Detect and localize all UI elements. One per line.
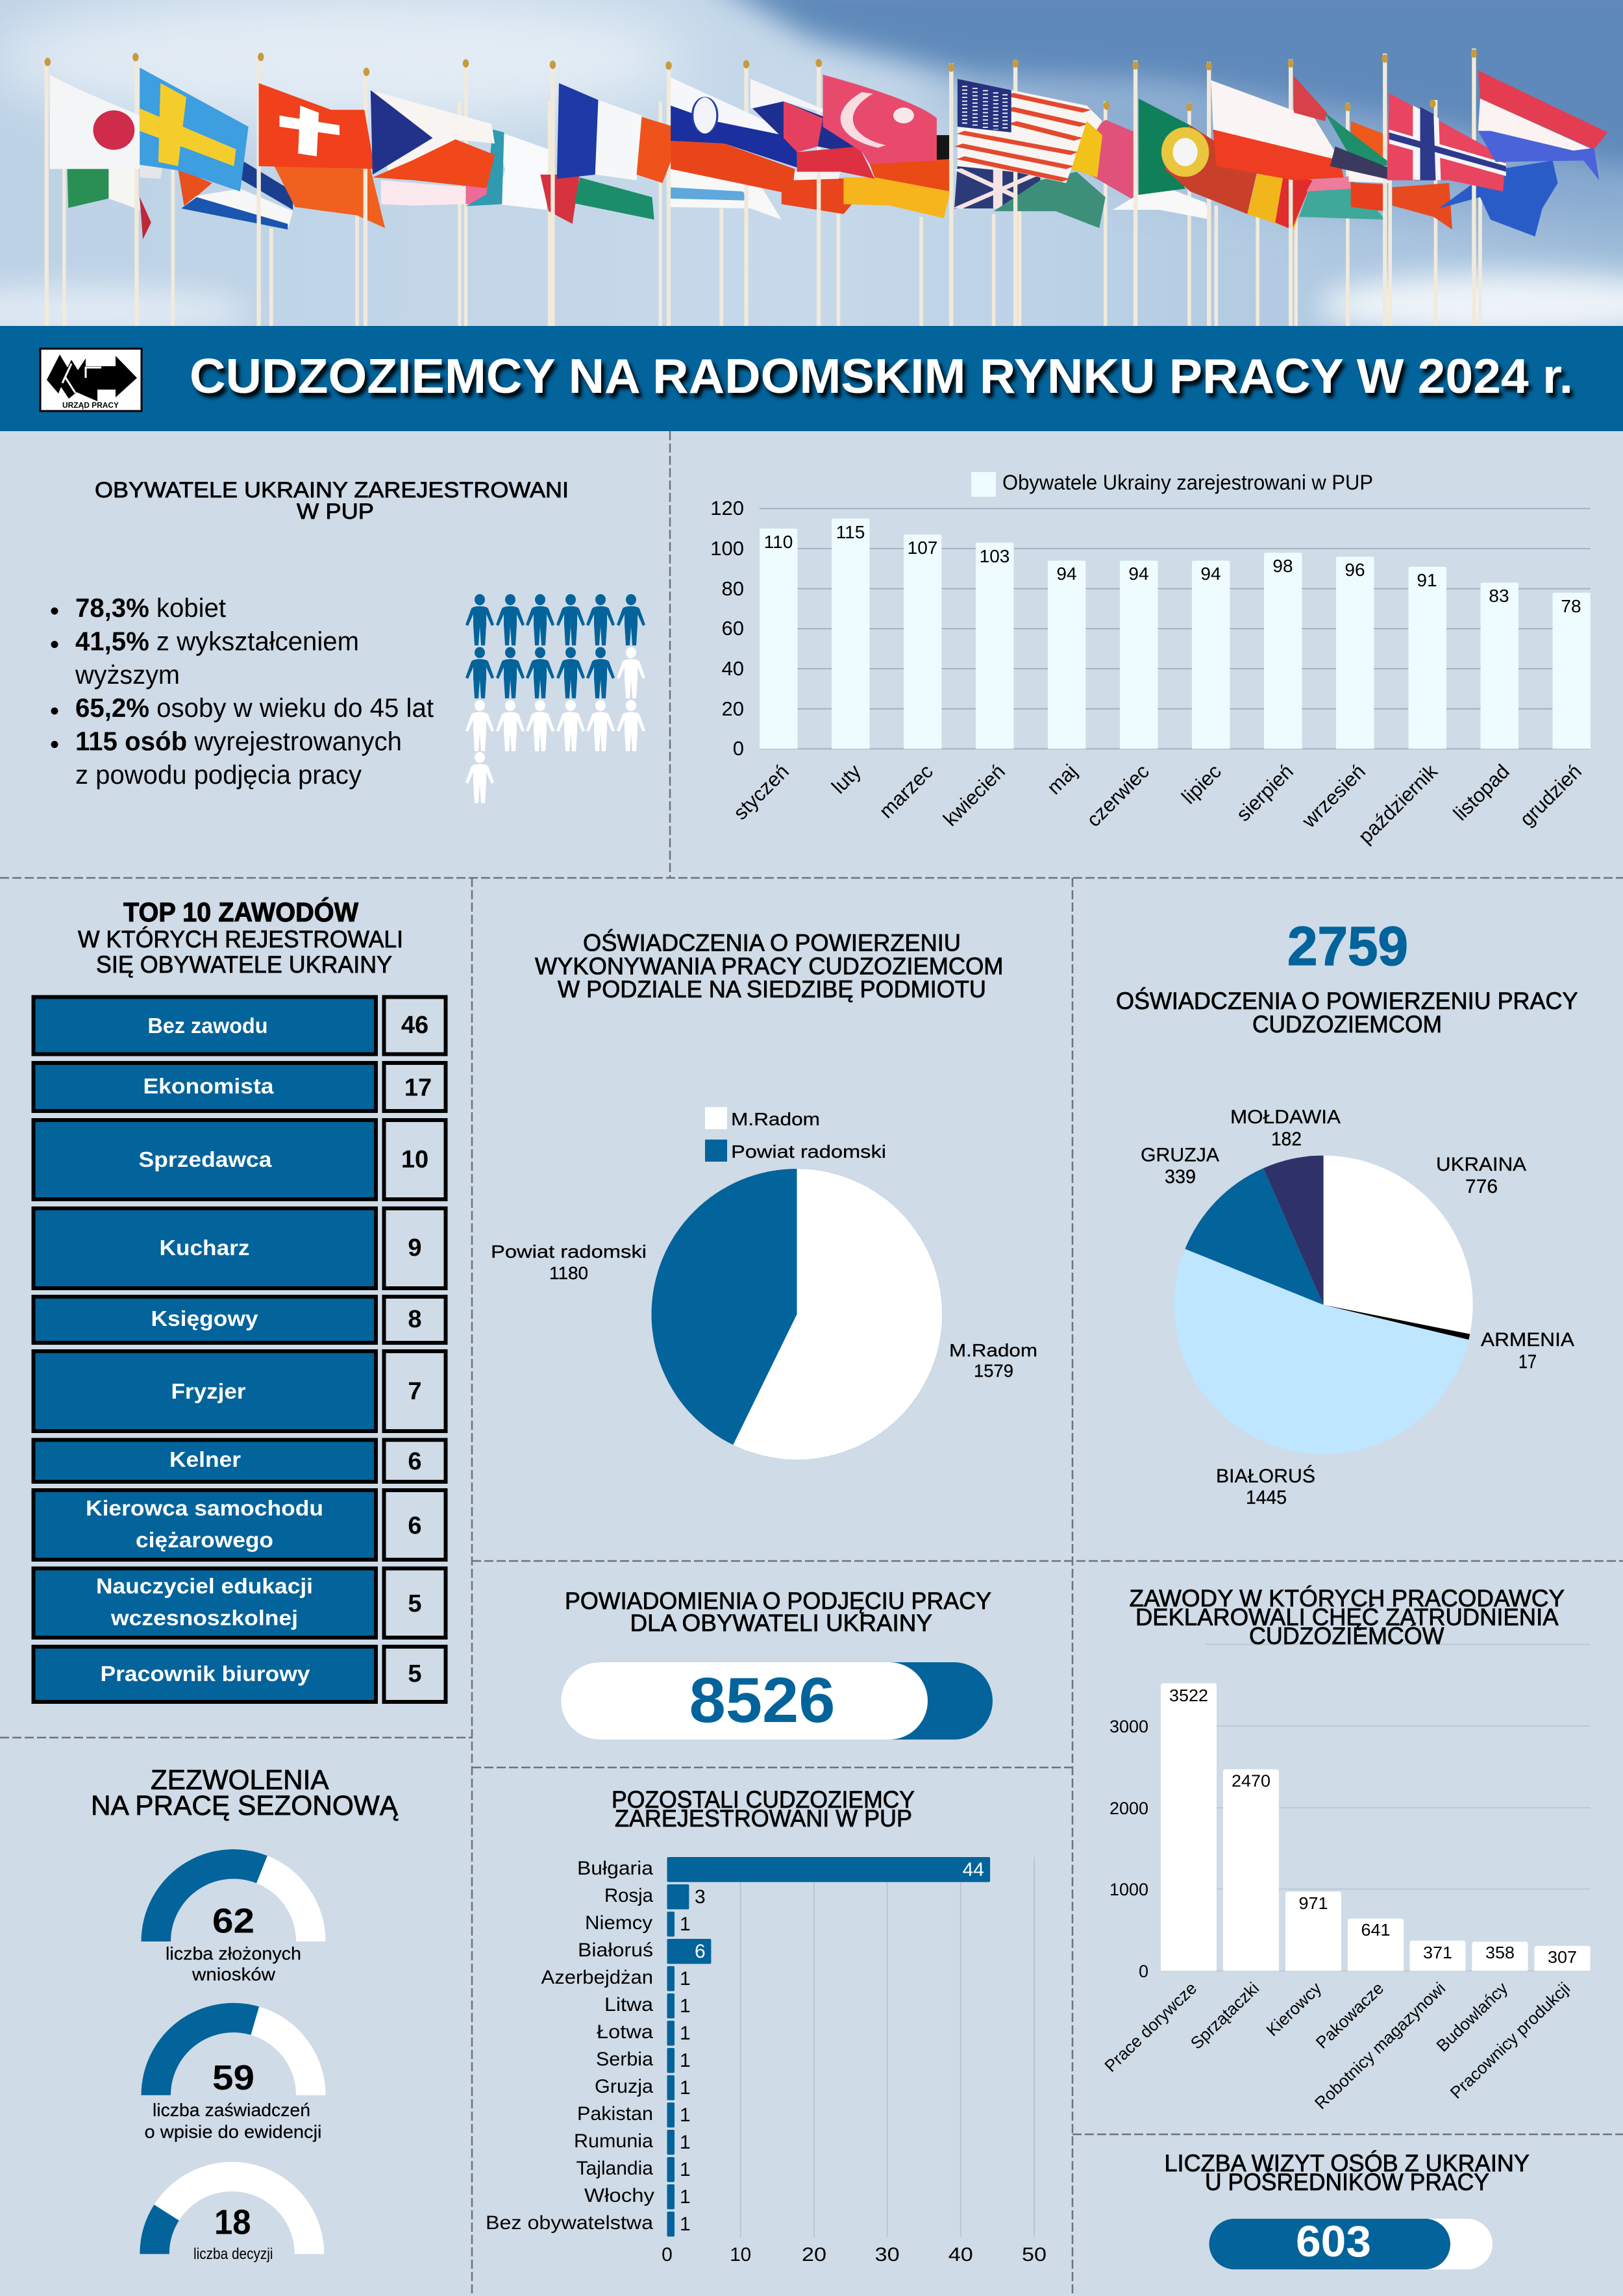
panel: declarations by country [1116,916,1578,1508]
horizontal bar chart: countries: 1 [680,2023,691,2044]
heading: declarations by country: CUDZOZIEMCOM [1252,1011,1442,1038]
bar chart: monthly registered Ukrainian citizens: 0 [733,737,744,760]
table of occupations: 17 [404,1074,432,1101]
data labels: 91 [1417,570,1437,590]
gauge: 18 decisions [140,2162,324,2263]
gauge: 59 certificates: liczba zaświadczeń [153,2100,310,2120]
bar chart: occupations: Pracownicy produkcji [1446,1978,1574,2103]
month axis labels: grudzień [1515,760,1586,830]
bullet list of statistics: 41,5% z wykształceniem [75,626,359,656]
heading: occupations declared [1130,1585,1565,1649]
table of occupations: 6 [408,1512,422,1540]
bar chart: monthly registered Ukrainian citizens: 60 [722,617,744,640]
data labels: 110 [764,532,793,552]
pie labels: countries: MOŁDAWIA [1230,1106,1341,1128]
horizontal bar chart: countries: 1 [680,1968,691,1990]
gauge: 62 applications: 62 [212,1901,254,1940]
heading: other foreigners: POZOSTALI CUDZOZIEMCY [612,1786,915,1813]
bullet list of statistics: 78,3% kobiet [75,593,227,623]
heading: Ukrainian citizens registered: W PUP [297,499,374,524]
horizontal bar chart: countries: 40 [948,2244,973,2265]
pie chart: Radom vs county [652,1169,943,1460]
pill: value 603: 603 [1296,2217,1371,2266]
panel: top 10 occupations [34,896,445,1702]
horizontal bar chart: countries: 3 [695,1886,706,1908]
bar chart: monthly registered Ukrainian citizens: 100 [710,537,744,560]
heading: seasonal work permits: ZEZWOLENIA [151,1765,329,1796]
bar chart: occupations: 641 [1361,1920,1391,1940]
bullet list of statistics: 65,2% osoby w wieku do 45 lat [75,693,434,723]
table of occupations: Kelner [169,1447,241,1471]
bar chart: monthly registered Ukrainian citizens [710,471,1591,848]
pie labels: countries: UKRAINA [1436,1154,1526,1175]
bar chart: occupations: Robotnicy magazynowi [1311,1978,1449,2113]
bar chart: occupations: 371 [1423,1943,1452,1962]
gauge: 18 decisions: liczba decyzji [193,2245,273,2263]
pie labels: countries: 17 [1518,1351,1537,1373]
bar chart: occupations: 358 [1485,1943,1515,1962]
heading: work notifications [565,1588,991,1636]
data labels: 96 [1344,560,1365,580]
horizontal bar chart: countries: Rosja [604,1885,653,1906]
horizontal bar chart: countries: Białoruś [578,1940,653,1961]
bullet list of statistics: wyższym [75,660,180,690]
table of occupations: Bez zawodu [148,1014,267,1038]
data labels [764,522,1581,616]
pill: value 603 [1209,2217,1493,2269]
heading: top 10 occupations: W KTÓRYCH REJESTROWALI [78,926,403,953]
bar chart: monthly registered Ukrainian citizens: 120 [710,497,744,519]
heading: declarations by location: WYKONYWANIA PRACY CUDZOZIEMCOM [535,953,1004,979]
heading: visits to job agents: U POŚREDNIKÓW PRACY [1205,2168,1489,2195]
gauge: 59 certificates: 59 [212,2058,254,2097]
bar chart: occupations: 3000 [1109,1717,1148,1736]
horizontal bar chart: countries [486,1857,1047,2265]
gauge: 62 applications [142,1849,326,1984]
horizontal bar chart: countries: 1 [680,2050,691,2071]
horizontal bar chart: countries: 10 [730,2244,751,2265]
heading: seasonal work permits [91,1765,398,1821]
pie legend: M.Radom [731,1109,820,1129]
heading: work notifications: POWIADOMIENIA O PODJĘCIU PRACY [565,1588,991,1614]
heading: declarations by country [1116,987,1578,1038]
table of occupations: 5 [408,1660,422,1688]
horizontal bar chart: countries: 1 [680,1995,691,2017]
bar chart: occupations: Sprzątaczki [1187,1978,1263,2053]
table of occupations: 9 [408,1234,422,1262]
bar chart: occupations: 2470 [1232,1771,1270,1791]
bar chart: occupations: Prace dorywcze [1100,1978,1200,2076]
bar chart: occupations [1100,1683,1591,2113]
heading: occupations declared: ZAWODY W KTÓRYCH PRACODAWCY [1130,1585,1565,1612]
table of occupations: ciężarowego [136,1528,273,1552]
pill: value 8526: 8526 [689,1664,835,1736]
bar chart: occupations: Budowlańcy [1432,1978,1511,2056]
big number 2759: 2759 [1287,916,1408,977]
horizontal bar chart: countries: 30 [875,2244,900,2265]
heading: seasonal work permits: NA PRACĘ SEZONOWĄ [91,1790,398,1821]
bar chart: occupations: 3522 [1169,1686,1208,1705]
table of occupations: Ekonomista [143,1074,274,1098]
bar chart: monthly registered Ukrainian citizens: 80 [722,577,744,600]
heading: declarations by location [535,929,1004,1003]
month axis labels: czerwiec [1082,760,1154,831]
data labels: 94 [1056,564,1077,584]
month axis labels: wrzesień [1297,760,1370,832]
main title: CUDZOZIEMCY NA RADOMSKIM RYNKU PRACY W 2024 r. [190,349,1573,403]
bar chart: occupations: 971 [1298,1893,1328,1913]
heading: top 10 occupations [78,896,403,978]
table of occupations: wczesnoszkolnej [110,1606,298,1630]
horizontal bar chart: countries: 1 [680,2214,691,2235]
pie legend [705,1107,886,1162]
bar chart: monthly registered Ukrainian citizens: 40 [722,657,744,680]
horizontal bar chart: countries: 1 [680,1914,691,1935]
data labels: 115 [836,522,865,542]
logo: Urząd Pracy: URZĄD PRACY [62,401,119,410]
horizontal bar chart: countries: Bułgaria [577,1858,653,1879]
table of occupations: 46 [401,1012,428,1039]
horizontal bar chart: countries: 44 [963,1859,984,1880]
gauge: 59 certificates: o wpisie do ewidencji [144,2122,322,2141]
horizontal bar chart: countries: 20 [802,2244,826,2265]
table of occupations [34,997,445,1702]
panel: work notifications [561,1588,993,1740]
data labels: 83 [1489,586,1509,606]
pie label: Radom: M.Radom [949,1340,1037,1360]
title band [0,326,1623,431]
pie labels: countries: 339 [1165,1166,1196,1188]
pie labels: countries: ARMENIA [1481,1329,1574,1351]
heading: occupations declared: CUDZOZIEMCÓW [1249,1623,1444,1649]
photo: flags against the sky [0,0,1623,338]
heading: declarations by location: W PODZIALE NA SIEDZIBĘ PODMIOTU [558,976,986,1003]
gauge: 18 decisions: 18 [214,2202,251,2241]
table of occupations: Kierowca samochodu [86,1496,323,1520]
legend: Obywatele Ukrainy zarejestrowani w PUP [1002,471,1373,494]
heading: top 10 occupations: TOP 10 ZAWODÓW [123,896,358,927]
pill: value 8526 [561,1662,993,1740]
horizontal bar chart: countries: Włochy [584,2185,654,2206]
data labels: 94 [1200,564,1221,584]
month axis labels: październik [1354,760,1442,848]
pie labels: countries: 776 [1465,1176,1498,1197]
table of occupations: 10 [401,1146,428,1173]
heading: top 10 occupations: SIĘ OBYWATELE UKRAINY [96,951,392,978]
bullet list of statistics: z powodu podjęcia pracy [75,760,362,790]
month axis labels: sierpień [1232,760,1298,826]
bar chart: occupations: 0 [1139,1962,1148,1981]
panel: declarations by location [491,929,1037,1460]
horizontal bar chart: countries: Litwa [604,1994,653,2015]
pie labels: countries: 1445 [1246,1487,1287,1508]
heading: other foreigners [612,1786,915,1832]
pie label: county [491,1242,647,1283]
pie labels: countries: BIAŁORUŚ [1216,1465,1315,1487]
horizontal bar chart: countries: 50 [1022,2244,1047,2265]
month axis labels: styczeń [729,760,793,824]
data labels: 94 [1128,564,1149,584]
horizontal bar chart: countries: Łotwa [597,2021,653,2043]
icon: pictogram of people [465,594,645,803]
bars [760,519,1591,749]
horizontal bar chart: countries: Tajlandia [576,2158,653,2179]
heading: visits to job agents [1165,2150,1530,2195]
horizontal bar chart: countries: 1 [680,2077,691,2099]
gauge: 59 certificates [142,2003,326,2141]
table of occupations: Nauczyciel edukacji [96,1574,313,1598]
pie label: Radom [949,1340,1037,1380]
pie label: county: 1180 [549,1263,588,1283]
pie labels: countries: GRUZJA [1141,1144,1219,1166]
table of occupations: Kucharz [160,1236,249,1260]
bar chart: occupations: 1000 [1109,1880,1148,1899]
pie labels: countries [1141,1106,1574,1508]
bullet list of statistics [51,593,434,790]
horizontal bar chart: countries: 6 [695,1941,706,1962]
bar chart: occupations: Kierowcy [1262,1978,1325,2040]
heading: work notifications: DLA OBYWATELI UKRAINY [630,1610,932,1636]
horizontal bar chart: countries: Serbia [596,2049,653,2070]
horizontal bar chart: countries: 1 [680,2104,691,2126]
data labels: 98 [1272,556,1293,576]
table of occupations: Pracownik biurowy [100,1662,310,1686]
bar chart: monthly registered Ukrainian citizens: 20 [722,697,744,720]
bullet list of statistics: 115 osób wyrejestrowanych [75,726,402,756]
heading: other foreigners: ZAREJESTROWANI W PUP [615,1805,912,1832]
pie labels: countries: 182 [1271,1129,1302,1150]
table of occupations: 6 [408,1448,422,1475]
table of occupations: Sprzedawca [139,1147,272,1171]
bar chart: occupations: Pakowacze [1312,1978,1387,2053]
horizontal bar chart: countries: Rumunia [574,2130,653,2152]
pie legend: Powiat radomski [731,1142,886,1162]
month axis labels: listopad [1449,760,1514,825]
table of occupations: Fryzjer [171,1379,246,1403]
gauge: 62 applications: wniosków [192,1964,276,1984]
horizontal bar chart: countries: 1 [680,2132,691,2153]
bar chart: occupations: 2000 [1109,1799,1148,1818]
logo: Urząd Pracy [40,349,142,411]
month axis labels [729,760,1586,848]
panel: Ukrainian citizens registered [51,478,645,803]
heading: occupations declared: DEKLAROWALI CHĘĆ ZATRUDNIENIA [1135,1604,1559,1630]
bar chart: occupations: 307 [1548,1947,1577,1967]
data labels: 78 [1561,596,1581,616]
pie chart: countries [1174,1156,1473,1454]
panel: seasonal work permits [91,1765,398,2263]
panel: occupations declared by employers [1100,1585,1591,2113]
data labels: 103 [980,546,1010,566]
horizontal bar chart: countries: Bez obywatelstwa [486,2212,653,2234]
heading: declarations by location: OŚWIADCZENIA O POWIERZENIU [583,929,961,956]
data labels: 107 [908,538,937,558]
month axis labels: marzec [874,760,937,823]
horizontal bar chart: countries: 1 [680,2186,691,2208]
month axis labels: luty [827,760,865,798]
panel: visits to job agents [1165,2150,1530,2269]
month axis labels: lipiec [1177,760,1226,808]
month axis labels: kwiecień [939,760,1010,830]
pie label: Radom: 1579 [974,1361,1013,1380]
horizontal bar chart: countries: 0 [662,2244,673,2265]
pie label: county: Powiat radomski [491,1242,647,1262]
horizontal bar chart: countries: 1 [680,2159,691,2180]
month axis labels: maj [1043,760,1082,799]
heading: declarations by country: OŚWIADCZENIA O POWIERZENIU PRACY [1116,987,1578,1014]
horizontal bar chart: countries: Azerbejdżan [541,1967,653,1988]
table of occupations: 7 [408,1378,422,1405]
horizontal bar chart: countries: Niemcy [585,1912,652,1934]
heading: visits to job agents: LICZBA WIZYT OSÓB Z UKRAINY [1165,2150,1530,2177]
table of occupations: Księgowy [151,1306,258,1330]
horizontal bar chart: countries: Gruzja [595,2076,653,2097]
table of occupations: 5 [408,1590,422,1617]
panel: other foreigners registered [486,1786,1047,2265]
table of occupations: 8 [408,1306,422,1333]
heading: Ukrainian citizens registered: OBYWATELE UKRAINY ZAREJESTROWANI [95,478,569,503]
heading: Ukrainian citizens registered [95,478,569,524]
gauge: 62 applications: liczba złożonych [166,1943,301,1964]
horizontal bar chart: countries: Pakistan [577,2103,653,2125]
